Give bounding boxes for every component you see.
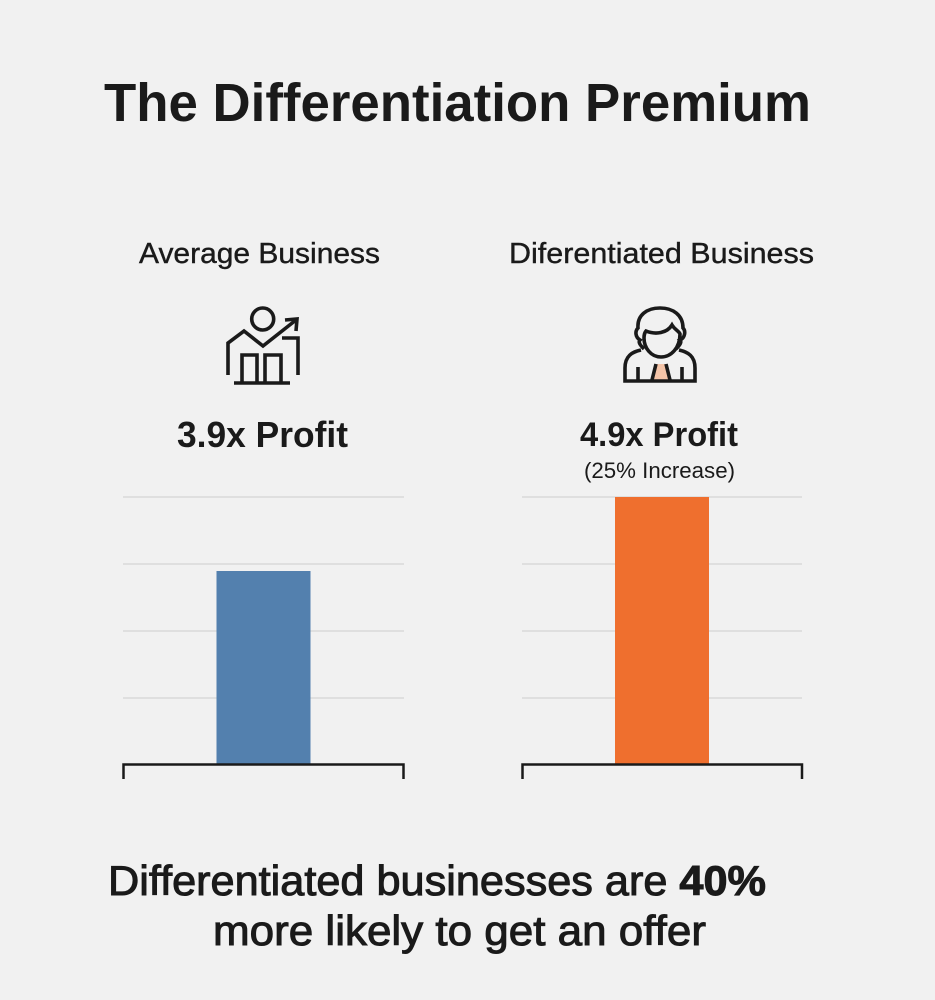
- heading: differentiated business: Diferentiated Business: [509, 238, 814, 270]
- icon: business person with tie: [625, 308, 695, 381]
- increase note: (25% Increase): [584, 458, 735, 483]
- bar: 4.9x: [615, 497, 709, 764]
- heading: average business: Average Business: [139, 238, 380, 270]
- bar chart: average business: [123, 497, 404, 779]
- icon: growth chart with person: [228, 308, 298, 383]
- bar chart: differentiated business: [522, 497, 802, 779]
- callout: Differentiated businesses are 40%: [108, 857, 766, 904]
- panel: average business: [123, 238, 404, 779]
- title: The Differentiation Premium: [104, 73, 811, 133]
- callout: more likely to get an offer: [213, 907, 706, 954]
- panel: differentiated business: [509, 238, 814, 779]
- profit value: 4.9x: 4.9x Profit: [580, 416, 738, 454]
- profit value: 3.9x: 3.9x Profit: [177, 414, 348, 455]
- callout: [108, 857, 766, 954]
- bar: 3.9x: [216, 571, 310, 764]
